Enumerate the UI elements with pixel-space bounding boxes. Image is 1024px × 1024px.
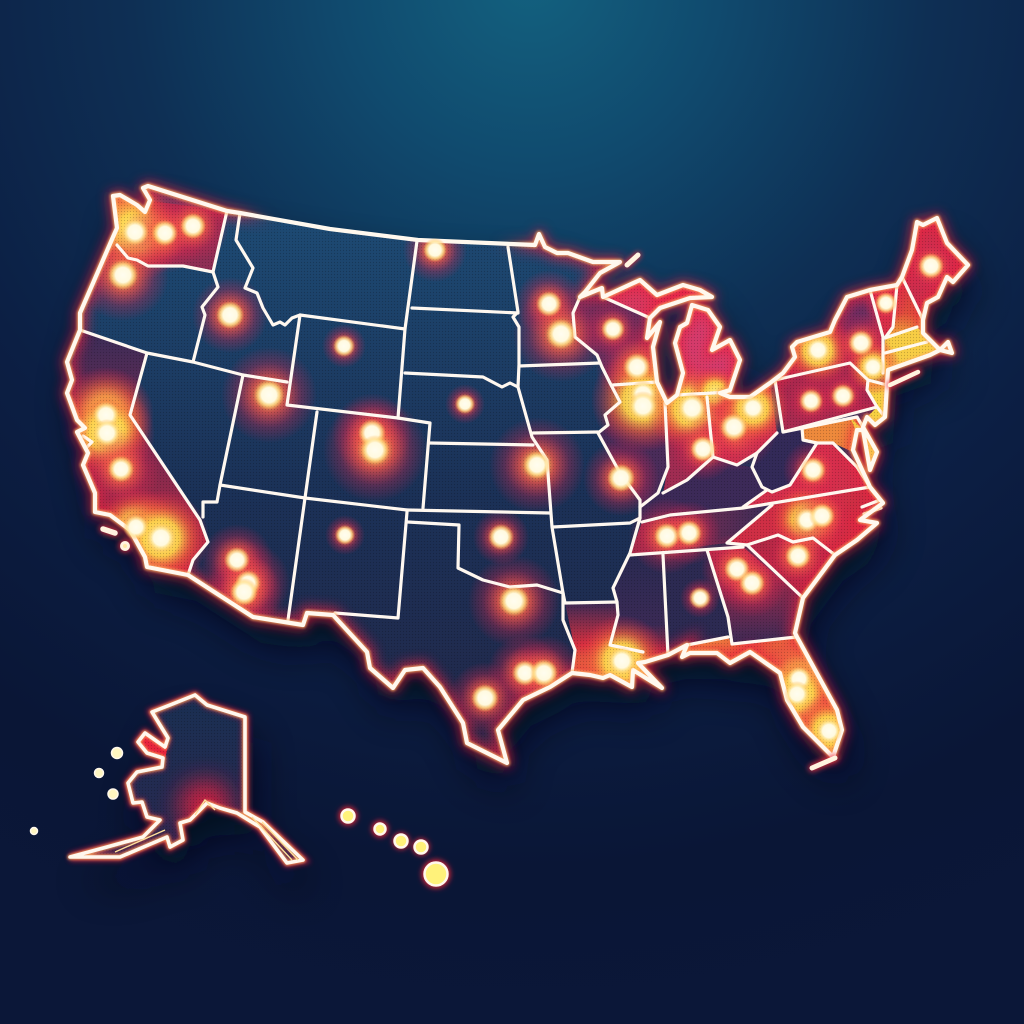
state tints <box>60 196 968 757</box>
Alaska texture <box>70 695 303 863</box>
map drop shadow <box>75 212 976 889</box>
city light dots <box>92 213 944 744</box>
inner edge glow <box>67 186 968 763</box>
map: Alaska <box>70 695 303 863</box>
Alaska outer glow <box>70 695 303 863</box>
bright yellow states <box>851 328 936 462</box>
Alaska coast halo <box>70 695 303 863</box>
Aleutian islands <box>30 748 122 834</box>
Hawaii glow <box>339 807 450 888</box>
heat glows <box>58 178 959 769</box>
Alaska land <box>70 695 303 863</box>
halftone texture <box>67 186 968 763</box>
Alaska outline <box>70 695 303 863</box>
state border lines <box>80 211 927 673</box>
map: contiguous United States <box>58 178 968 769</box>
Alaska panhandle and peninsula detail <box>115 800 298 860</box>
Hawaii discs <box>342 810 448 886</box>
outer red glow <box>67 186 968 763</box>
coastline warm halo <box>67 186 968 763</box>
land base <box>67 186 968 763</box>
offshore islands: Long Island, Isle Royale, Channel Islands, Florida Keys <box>103 255 918 768</box>
coastline outline <box>67 186 968 763</box>
Alaska heat glow <box>70 695 303 863</box>
Hawaii islands <box>339 807 450 888</box>
